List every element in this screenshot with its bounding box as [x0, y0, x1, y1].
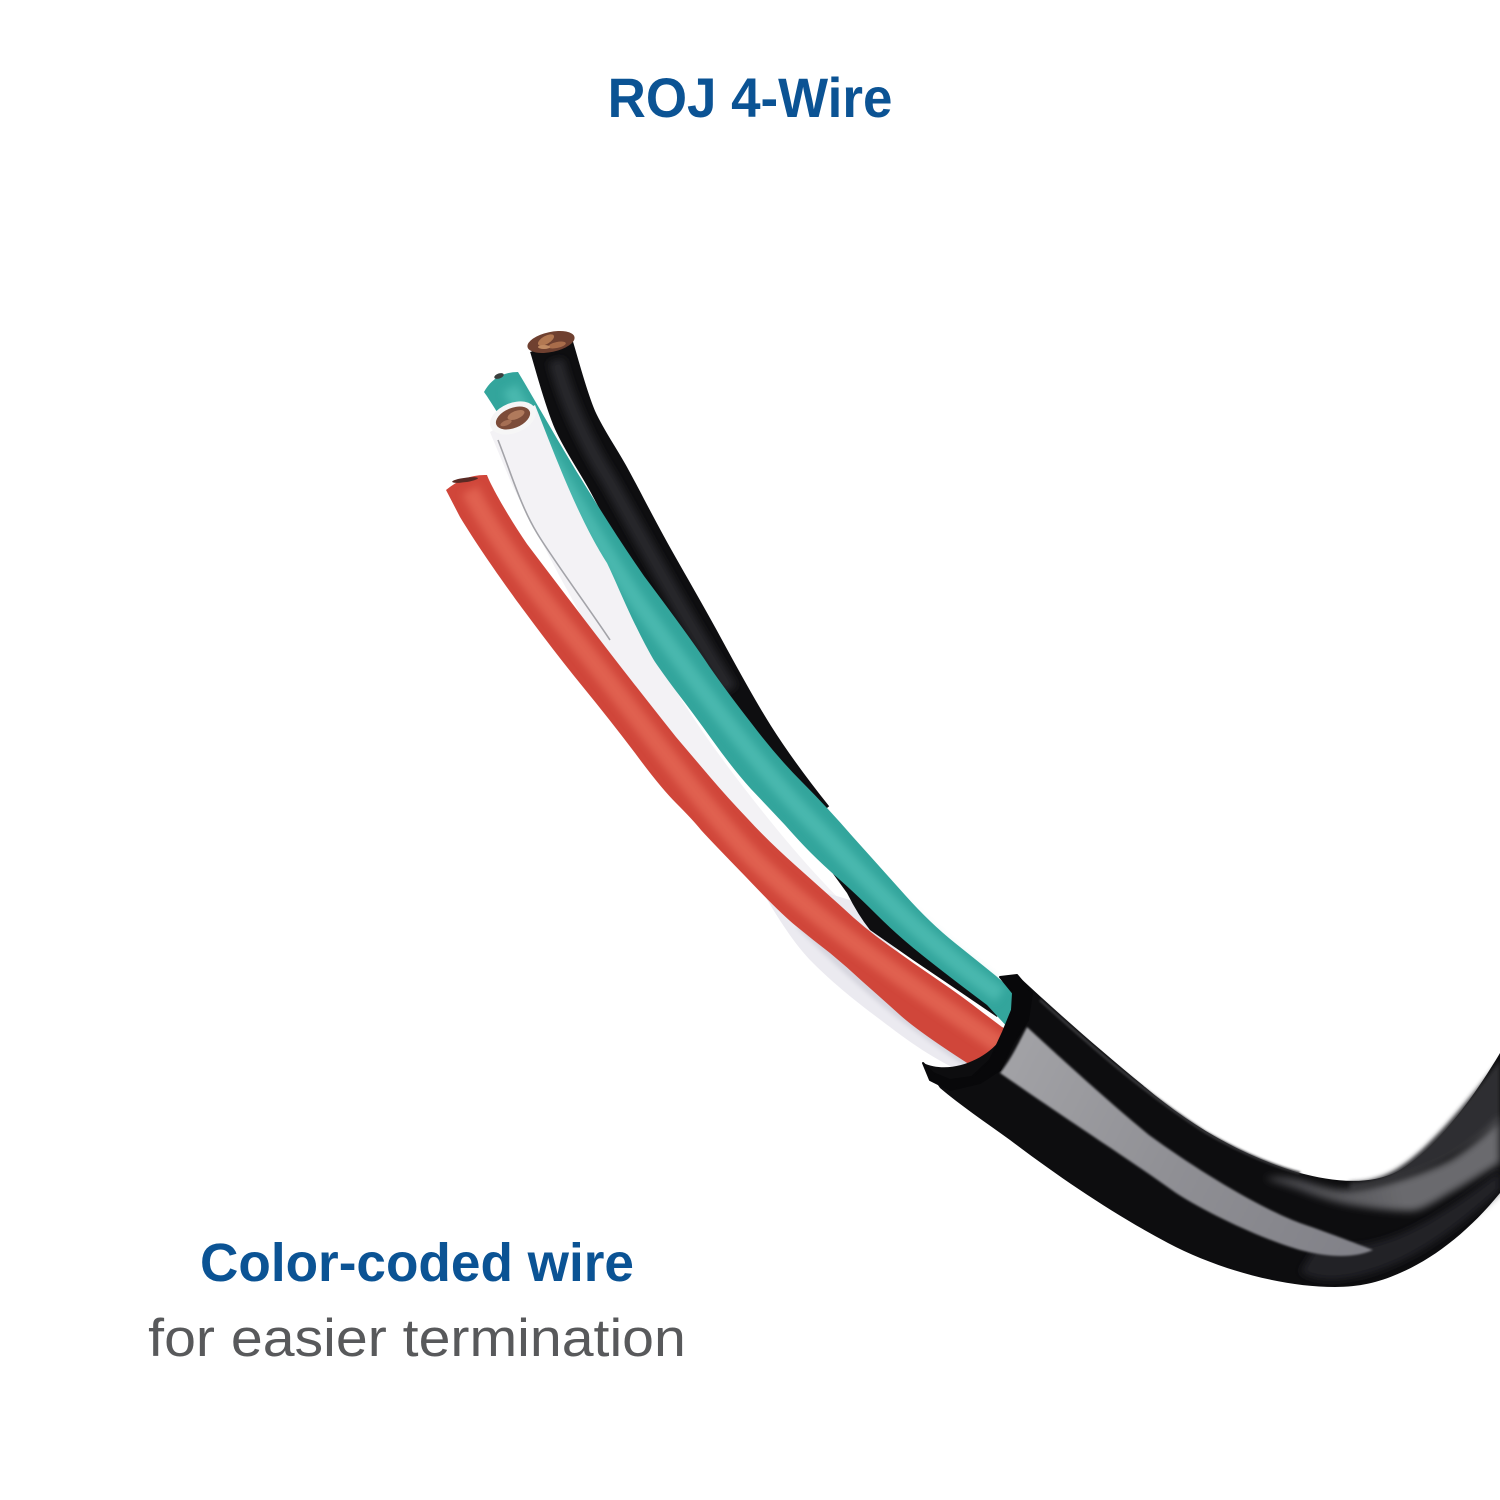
jacket collar: [923, 975, 1032, 1090]
tracer line: [498, 440, 610, 640]
callout text: [148, 1233, 686, 1368]
red conductor spot: [452, 476, 478, 484]
teal wire: [484, 372, 1030, 1030]
jacket lower sheen: [1300, 1170, 1500, 1280]
white wire: [513, 418, 1000, 1078]
white wire lower section: [750, 870, 1000, 1078]
title: ROJ 4-Wire: [608, 66, 892, 129]
callout heading: Color-coded wire: [200, 1233, 634, 1293]
callout subtext: for easier termination: [148, 1309, 686, 1368]
jacket dark upper band at bend: [1350, 1060, 1500, 1190]
teal conductor spot: [493, 372, 505, 380]
jacket highlight: [1000, 1027, 1373, 1256]
outer jacket: [923, 975, 1500, 1287]
copper strands: black wire: [525, 327, 577, 357]
white wire top overlap: [485, 395, 662, 674]
black wedge between teal and red: [823, 860, 1005, 1017]
jacket bend sheen: [1265, 1117, 1500, 1211]
jacket edge line: [1040, 1000, 1300, 1173]
copper strands: white wire: [493, 402, 533, 434]
white wire end: [485, 395, 541, 441]
red wire: [446, 475, 1030, 1085]
black wire: [525, 327, 812, 820]
